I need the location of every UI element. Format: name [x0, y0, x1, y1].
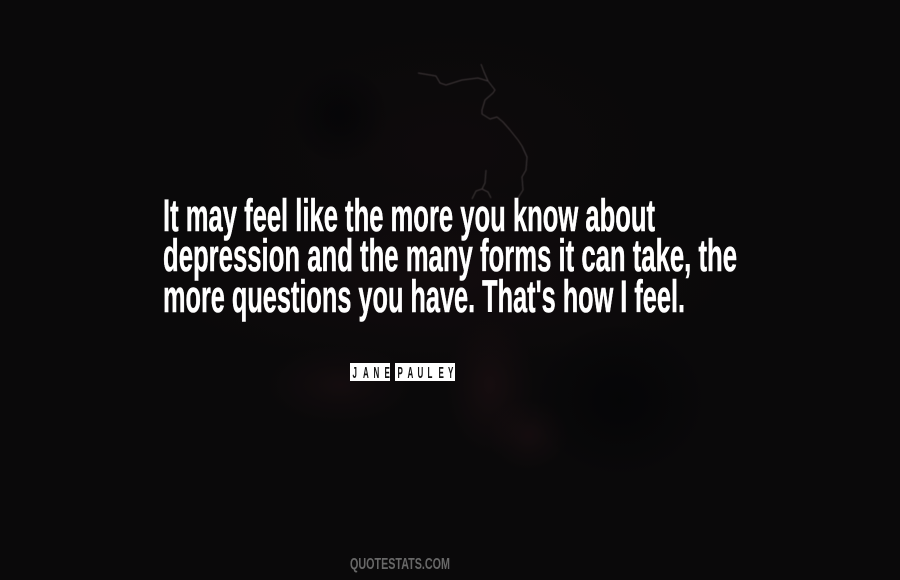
quote text — [163, 190, 737, 322]
icon: lightning bolt — [418, 64, 527, 199]
author label — [350, 363, 455, 382]
author last name tag: PAULEY — [398, 364, 454, 382]
author first name tag: JANE — [352, 364, 390, 382]
watermark: site name: QUOTESTATS.COM — [350, 556, 450, 573]
